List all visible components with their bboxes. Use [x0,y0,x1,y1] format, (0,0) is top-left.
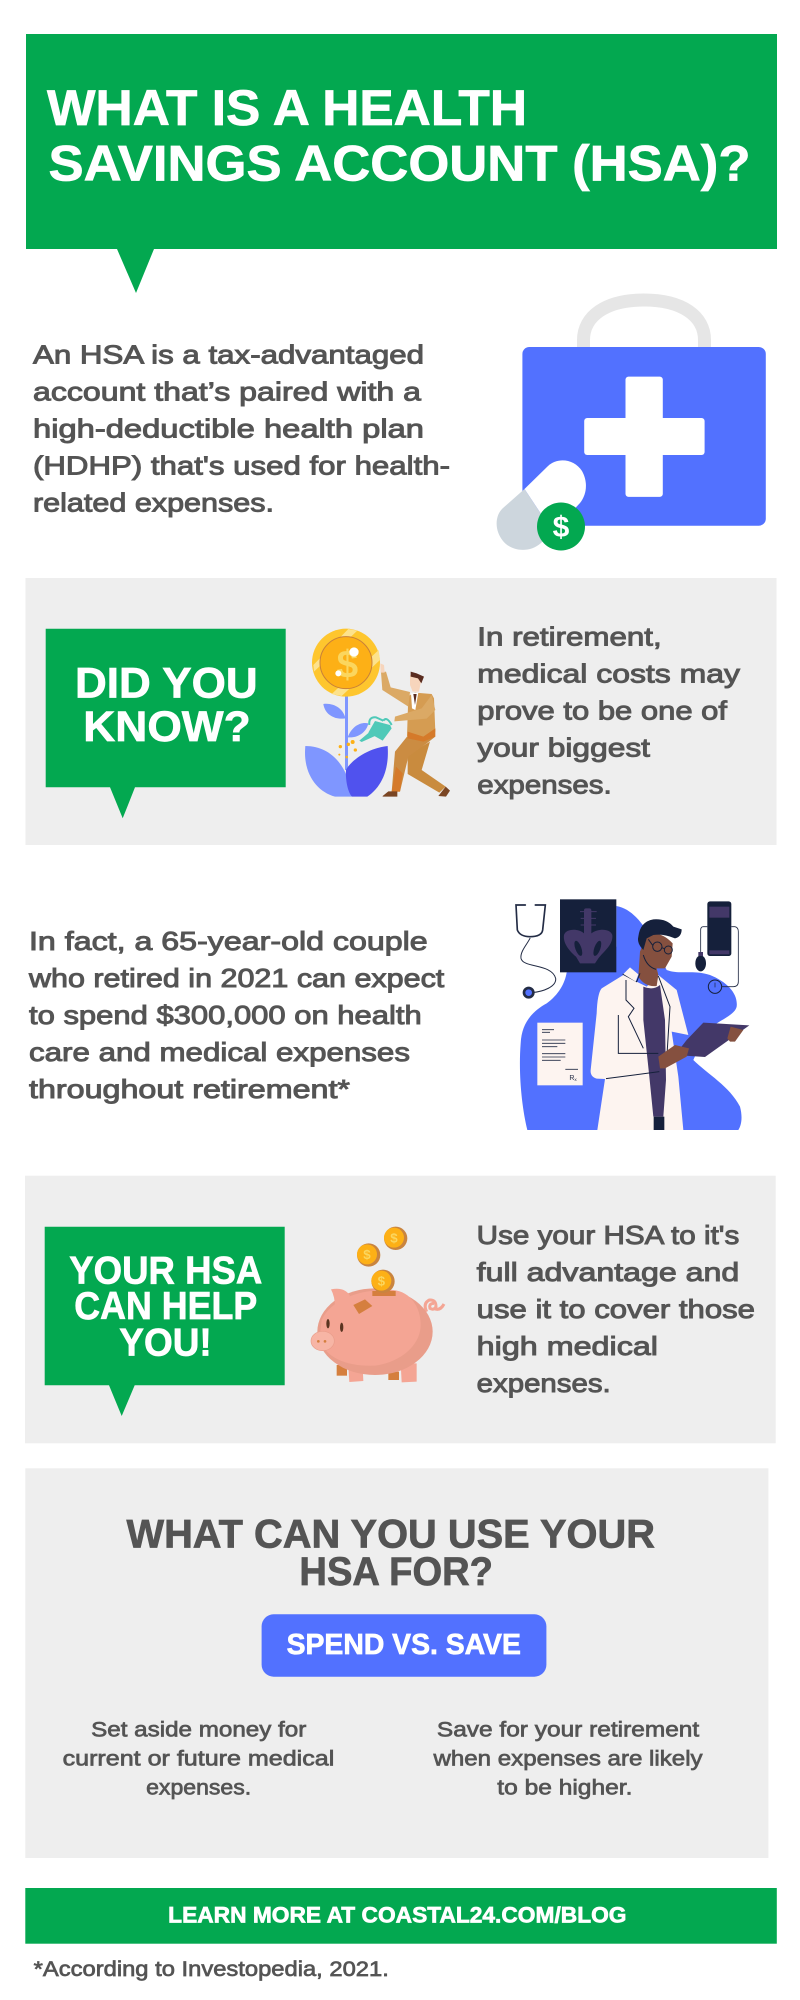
callout: your hsa can help you: CAN HELP [74,1285,257,1328]
intro text: account that’s paired with a [33,377,422,407]
icon: medical bag with pill and dollar coin [497,300,766,550]
text: save column: to be higher. [497,1777,632,1800]
text: use your hsa: expenses. [477,1368,611,1398]
prescription sheet: R [569,1075,574,1082]
footnote: *According to Investopedia, 2021. [34,1958,389,1981]
heading [126,1512,655,1594]
panel: what can you use your hsa for [25,1468,768,1858]
text: spend column [63,1719,334,1800]
text: retirement costs: In retirement, [477,622,662,652]
text: 65-year-old couple fact: throughout retirement* [29,1074,350,1104]
title banner [26,34,777,293]
blood pressure monitor [695,901,738,993]
text: use your hsa: full advantage and [477,1257,739,1287]
panel: your hsa can help [25,1176,776,1443]
x-ray [560,899,616,972]
text: 65-year-old couple fact: to spend $300,000 on health [29,1000,422,1030]
text: retirement costs: prove to be one of [477,696,728,726]
prescription sheet: x [574,1077,577,1082]
title: SAVINGS ACCOUNT (HSA)? [48,136,750,192]
footer banner: LEARN MORE AT COASTAL24.COM/BLOG [168,1903,626,1928]
title: WHAT IS A HEALTH [47,80,527,136]
doctor figure [591,919,749,1130]
intro text [33,340,450,518]
button: spend vs save: SPEND VS. SAVE [287,1629,521,1661]
illustration: piggy bank with coins: $ [363,1247,371,1262]
illustration: doctor with clipboard [516,899,749,1130]
text: spend column: current or future medical [63,1748,334,1771]
illustration: man watering coin plant: $ [337,643,358,686]
button: spend vs save [262,1614,546,1677]
callout: did you know: KNOW? [83,703,251,751]
text: spend column: Set aside money for [91,1719,306,1742]
text: 65-year-old couple fact: care and medical expenses [29,1037,410,1067]
text: save column: when expenses are likely [432,1748,703,1771]
intro text: An HSA is a tax-advantaged [33,340,424,370]
callout: your hsa can help you: YOU! [119,1321,212,1364]
text: retirement costs: medical costs may [477,659,740,689]
text: save column: Save for your retirement [437,1719,699,1742]
intro text: high-deductible health plan [33,414,424,444]
callout: did you know: DID YOU [75,660,258,708]
stethoscope [516,905,556,997]
text: retirement costs: expenses. [477,770,612,800]
callout: your hsa can help you [45,1227,285,1416]
text: retirement costs: your biggest [477,733,651,763]
intro text: (HDHP) that's used for health- [33,451,450,481]
text: use your hsa: Use your HSA to it's [477,1220,739,1250]
text: 65-year-old couple fact: In fact, a 65-year-old couple [29,926,428,956]
illustration: piggy bank with coins [311,1227,444,1382]
text: save column [432,1719,703,1800]
text: spend column: expenses. [146,1777,251,1800]
callout: your hsa can help you: YOUR HSA [69,1249,262,1292]
title [47,80,750,192]
text: 65-year-old couple fact: who retired in 2021 can expect [28,963,445,993]
text: use your hsa [477,1220,755,1398]
intro text: related expenses. [33,488,274,518]
text: use your hsa: use it to cover those [477,1294,755,1324]
footer banner [25,1888,777,1944]
prescription sheet [537,1023,583,1085]
text: retirement costs [477,622,740,800]
text: use your hsa: high medical [477,1331,658,1361]
dollar coin [537,502,585,550]
illustration: piggy bank with coins: $ [390,1230,398,1245]
illustration: piggy bank with coins: $ [378,1273,386,1288]
text: 65-year-old couple fact [28,926,445,1104]
illustration: man watering coin plant [305,629,450,797]
heading: HSA FOR? [299,1550,493,1594]
dollar coin: $ [553,511,570,544]
panel: did you know [26,578,776,845]
callout: did you know [46,629,286,818]
heading: WHAT CAN YOU USE YOUR [126,1512,655,1556]
